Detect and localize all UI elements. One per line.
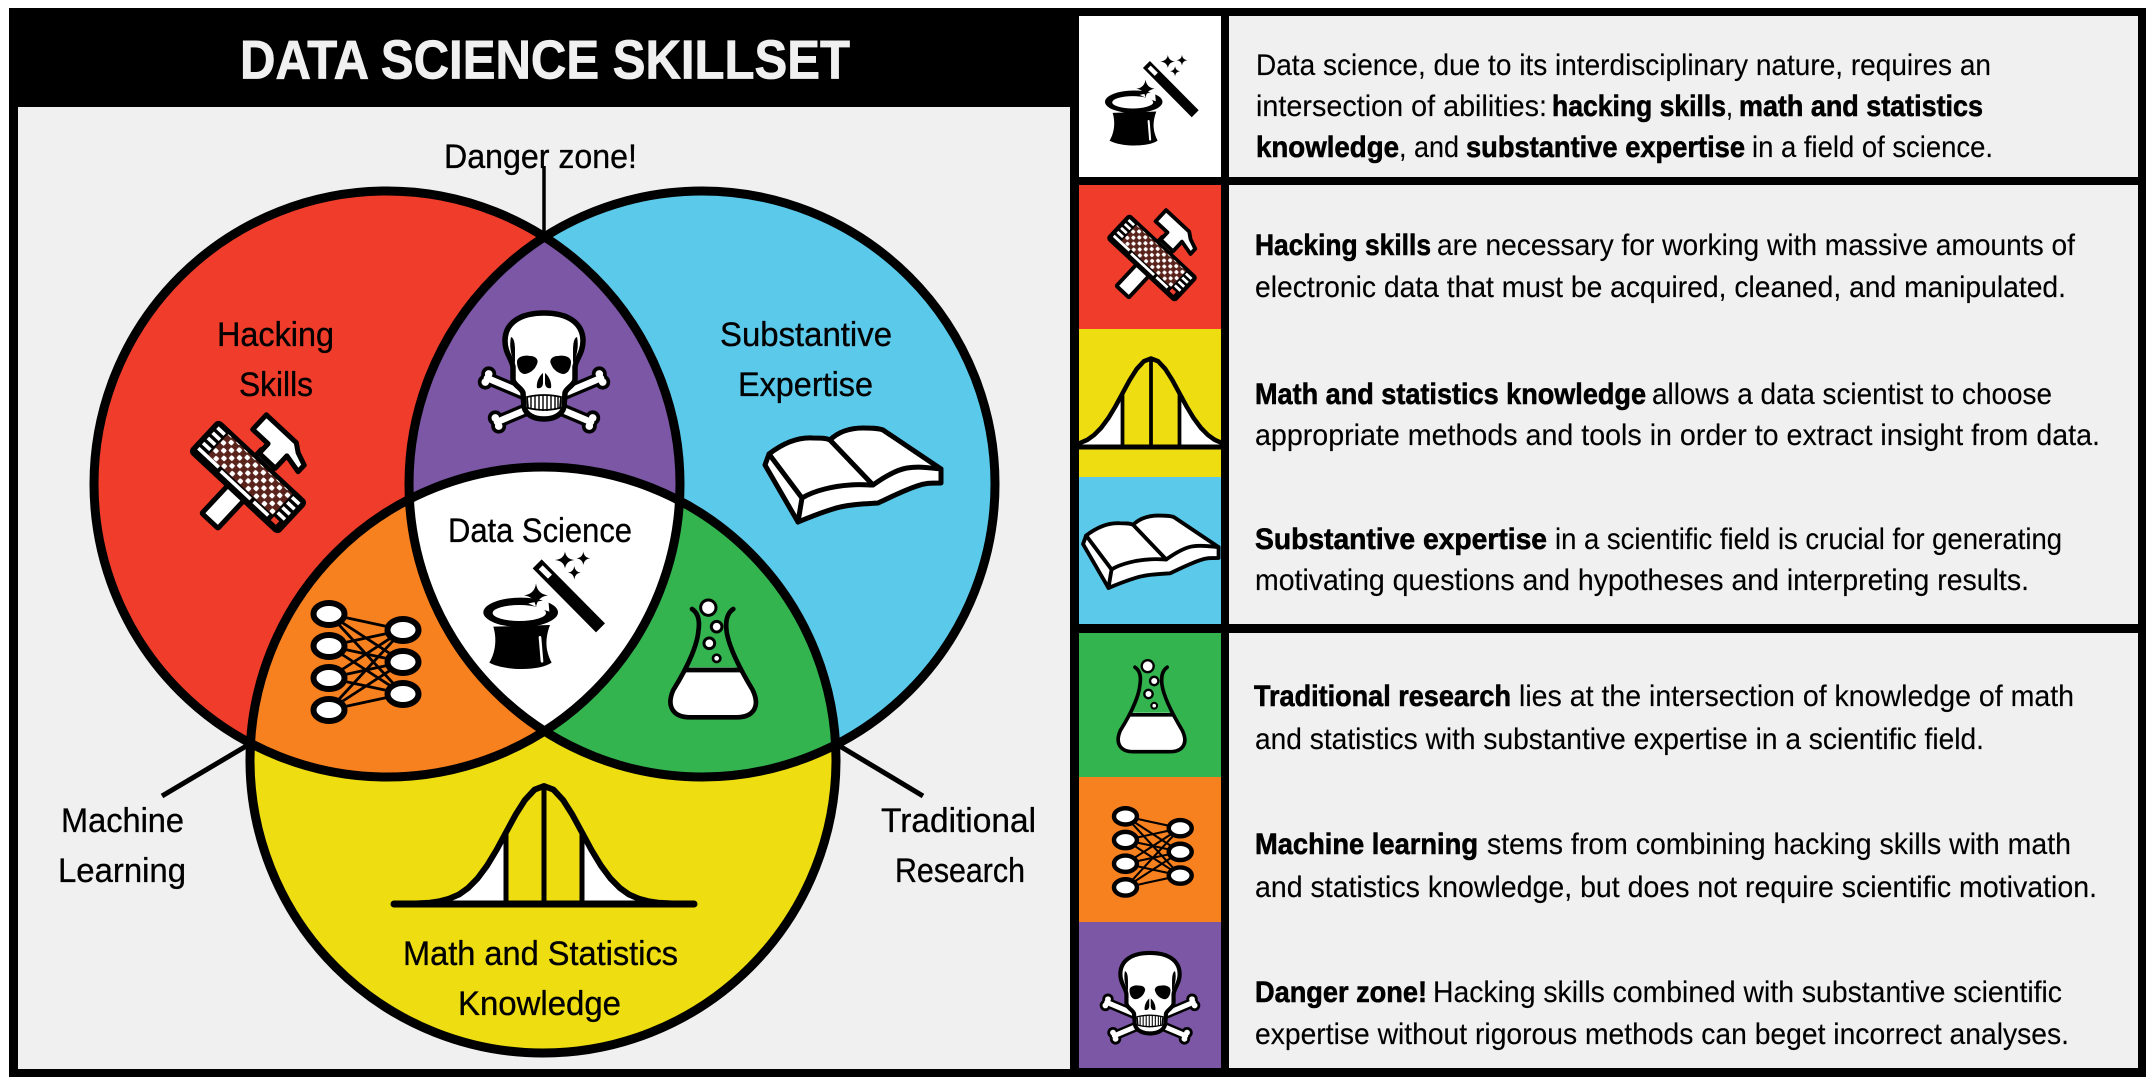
label: hacking skills: Hacking: [217, 316, 334, 354]
text: hacking skills: are necessary for working with massive amounts of: [1437, 229, 2076, 262]
text: substantive expertise: in a scientific field is crucial for generating: [1555, 523, 2062, 556]
danger zone pointer line: [542, 166, 546, 234]
label: data science: Data Science: [448, 512, 632, 550]
text: substantive expertise: motivating questions and hypotheses and interpreting results.: [1255, 564, 2029, 597]
text: introduction: in a field of science.: [1752, 131, 1993, 164]
legend icon: magic hat and wand: [1105, 55, 1199, 145]
legend icon: flask: [1118, 660, 1185, 752]
text: math and statistics knowledge: allows a data scientist to choose: [1652, 378, 2052, 411]
text: danger zone: [1255, 976, 2069, 1051]
label: hacking skills: [217, 316, 334, 404]
region: machine learning: [255, 506, 536, 772]
text: danger zone: expertise without rigorous methods can beget incorrect analyses.: [1255, 1018, 2069, 1051]
text: substantive expertise: [1255, 523, 2062, 597]
label: danger zone: Danger zone!: [444, 138, 637, 176]
text: introduction: knowledge: [1256, 131, 1399, 164]
label: machine learning: [58, 802, 186, 890]
label: math and statistics knowledge: Knowledge: [458, 985, 621, 1023]
panel: legend icons: [1079, 16, 1221, 1068]
legend icon: keyboard and hammer: [1088, 194, 1216, 322]
label: math and statistics knowledge: [403, 935, 678, 1023]
swatch: machine learning: [1079, 777, 1221, 922]
label: traditional research: Traditional: [881, 802, 1036, 840]
region: traditional research: [553, 508, 831, 772]
legend icon: bell curve: [1079, 356, 1221, 450]
text: introduction: substantive expertise: [1466, 131, 1745, 164]
text: machine learning: stems from combining hacking skills with math: [1487, 828, 2071, 861]
legend icon: neural network: [1114, 808, 1192, 896]
text: introduction: , and: [1399, 131, 1459, 164]
text: substantive expertise: Substantive expertise: [1255, 523, 1547, 556]
label: substantive expertise: [720, 316, 892, 404]
swatch: substantive expertise: [1079, 477, 1221, 624]
label: substantive expertise: Expertise: [738, 366, 873, 404]
text: machine learning: [1255, 828, 2097, 904]
icon: magic hat and wand: [483, 551, 605, 669]
text: machine learning: Machine learning: [1255, 828, 1478, 861]
text: machine learning: and statistics knowledge, but does not require scientific motivation.: [1255, 871, 2097, 904]
icon: flask: [670, 600, 757, 717]
text: introduction: math and statistics: [1739, 90, 1983, 123]
region: data science: [414, 472, 675, 726]
icon: keyboard and hammer: [165, 394, 331, 560]
legend icon: open book: [1083, 516, 1219, 588]
swatch: hacking skills: [1079, 185, 1221, 329]
text: math and statistics knowledge: appropriate methods and tools in order to extract insight from data.: [1255, 419, 2100, 452]
text: introduction: hacking skills: [1552, 90, 1726, 123]
swatch: traditional research: [1079, 633, 1221, 777]
machine learning pointer line: [162, 745, 248, 796]
swatch: math and statistics: [1079, 329, 1221, 477]
icon: skull and crossbones: [478, 313, 610, 434]
text: traditional research: and statistics with substantive expertise in a scientific field.: [1255, 723, 1984, 756]
label: machine learning: Machine: [61, 802, 184, 840]
panel: venn diagram: [18, 29, 1070, 1069]
text: introduction: ,: [1726, 90, 1733, 123]
region: danger zone: [414, 242, 676, 494]
text: hacking skills: [1255, 229, 2076, 304]
traditional research pointer line: [838, 745, 923, 796]
legend icon: skull and crossbones: [1100, 953, 1200, 1045]
label: substantive expertise: Substantive: [720, 316, 892, 354]
text: traditional research: Traditional research: [1254, 680, 1511, 713]
text: introduction: Data science, due to its interdisciplinary nature, requires an: [1256, 49, 1991, 82]
venn background panel: [18, 107, 1070, 1069]
text: math and statistics knowledge: Math and statistics knowledge: [1255, 378, 1646, 411]
text: introduction: intersection of abilities:: [1256, 90, 1547, 123]
label: traditional research: [881, 802, 1036, 890]
icon: neural network: [314, 603, 418, 721]
label: traditional research: Research: [895, 852, 1025, 890]
circle: hacking skills: [94, 191, 680, 777]
text: danger zone: Hacking skills combined with substantive scientific: [1433, 976, 2062, 1009]
panel: intro text cell: [1229, 16, 2138, 177]
text: math and statistics knowledge: [1255, 378, 2100, 452]
swatch: danger zone: [1079, 922, 1221, 1068]
text: hacking skills: electronic data that must be acquired, cleaned, and manipulated.: [1255, 271, 2066, 304]
circle: substantive expertise: [409, 191, 995, 777]
text: introduction: [1256, 49, 1993, 164]
label: machine learning: Learning: [58, 852, 186, 890]
panel: core skills text cell: [1229, 185, 2138, 624]
swatch: data science: [1079, 16, 1221, 177]
icon: open book: [765, 428, 941, 522]
title: DATA SCIENCE SKILLSET: [240, 29, 850, 91]
text: hacking skills: Hacking skills: [1255, 229, 1431, 262]
label: hacking skills: Skills: [239, 366, 313, 404]
venn circle outlines: [94, 191, 995, 1053]
text: traditional research: [1254, 680, 2074, 756]
label: math and statistics knowledge: Math and Statistics: [403, 935, 678, 973]
icon: bell curve: [394, 786, 694, 904]
circle: math and statistics: [250, 467, 836, 1053]
text: danger zone: Danger zone!: [1255, 976, 1427, 1009]
panel: intersections text cell: [1229, 633, 2138, 1068]
text: traditional research: lies at the intersection of knowledge of math: [1519, 680, 2074, 713]
